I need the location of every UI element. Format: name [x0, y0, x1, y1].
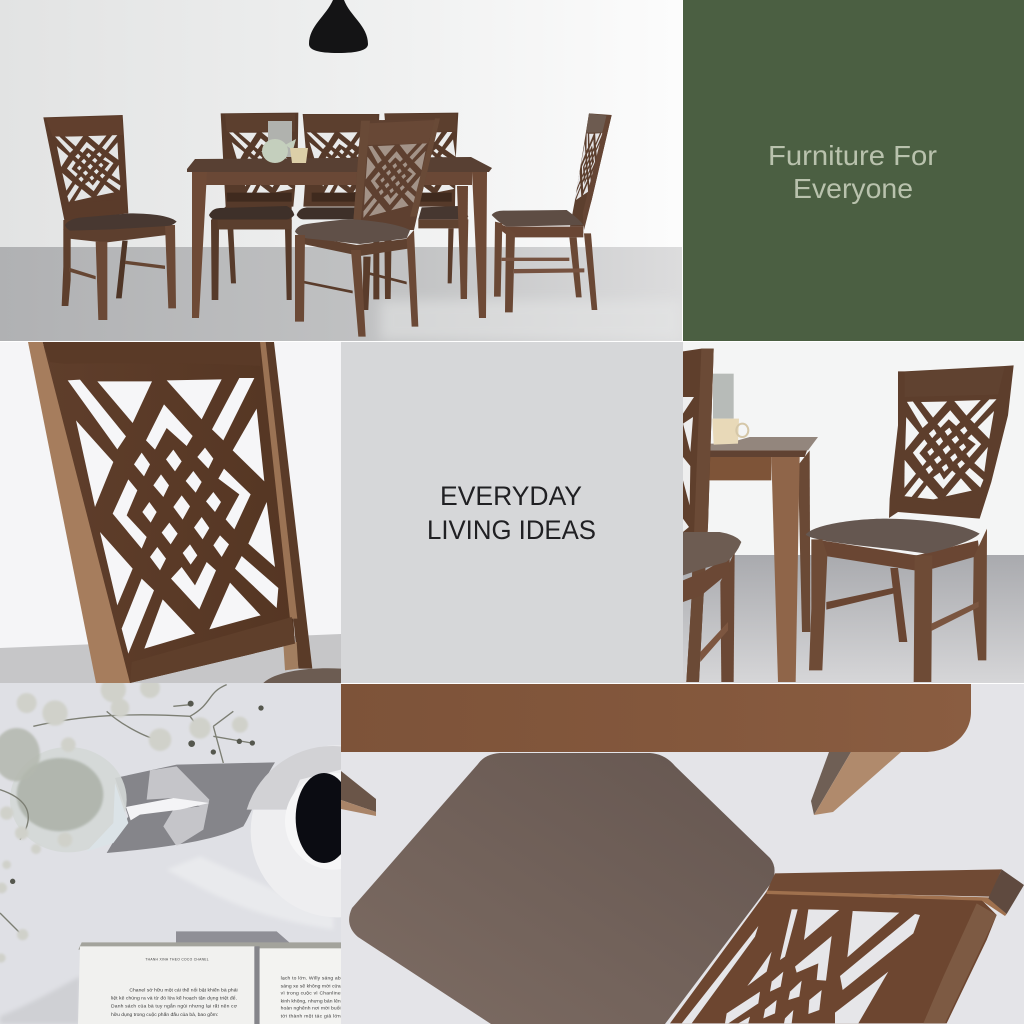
panel: table and chair photo [683, 342, 1024, 683]
cropped chair [683, 349, 741, 682]
book: vì trong cuộc vì Chanline [281, 991, 341, 997]
left chair [43, 115, 177, 320]
lattice openings [68, 378, 278, 654]
panel: top-down seat and table photo [341, 684, 1024, 1024]
back chair 1 [209, 113, 299, 300]
heading: Furniture For Everyone: Everyone [793, 173, 913, 204]
heading: Everyday Living Ideas: LIVING IDEAS [427, 515, 596, 545]
heading: Everyday Living Ideas: EVERYDAY [440, 481, 582, 511]
refracted light [147, 766, 209, 846]
saucer and coffee cup [246, 746, 341, 918]
front chair [295, 118, 440, 337]
right chair [492, 113, 612, 312]
book: THANH XINH THEO COCO CHANEL [145, 958, 209, 962]
main chair [806, 365, 1014, 682]
heading: Furniture For Everyone [768, 140, 937, 204]
book: hoàn nghênh nơi mời buổi [281, 1005, 341, 1012]
back chair 3 [373, 113, 468, 299]
back chair 2 [297, 114, 383, 219]
cups [712, 374, 750, 445]
book: Chanel sở hữu một cái thế nổi bật khiến bà phải [129, 986, 238, 993]
tea set [262, 121, 308, 163]
second table leg [457, 186, 468, 299]
book: Danh sách của bà tuy ngắn ngủi nhưng lại rất nên cơ [111, 1002, 238, 1009]
book: lạch to lớn. Willy sáng ab [281, 976, 341, 982]
heading: Furniture For Everyone: Furniture For [768, 140, 937, 171]
book: kinh không, nhưng bản lên [281, 998, 341, 1004]
table edge [341, 684, 971, 752]
heading: Everyday Living Ideas [427, 481, 596, 545]
vase [0, 728, 128, 852]
table leg left [341, 771, 376, 816]
book: tới thành một tác giả lớn [281, 1013, 341, 1019]
table leg right [811, 752, 901, 815]
book: sáng xe sẽ không mời cửa [281, 982, 341, 989]
panel: grey title block [341, 342, 683, 683]
shadow of vase [107, 762, 275, 853]
chair frame and lattice [670, 869, 1024, 1023]
book [78, 931, 341, 1024]
panel: flatlay with vase, coffee and book [0, 683, 341, 1024]
book: hữu dụng trong cuộc phấn đấu của bà, bao gồm: [111, 1011, 218, 1018]
icon: pendant lamp [309, 0, 368, 53]
panel: green title block [683, 0, 1024, 341]
seat cushion [349, 753, 775, 1024]
baby's breath flowers [0, 677, 264, 963]
panel: chair back close-up [0, 342, 341, 683]
table [710, 437, 818, 682]
book: liệt kê chúng ra và từ đó lửa kế hoạch tận dụng triệt để. [111, 995, 237, 1002]
seat corner [263, 668, 341, 683]
chair frame [43, 342, 295, 683]
table [187, 157, 492, 318]
panel: dining set photo [0, 0, 682, 341]
